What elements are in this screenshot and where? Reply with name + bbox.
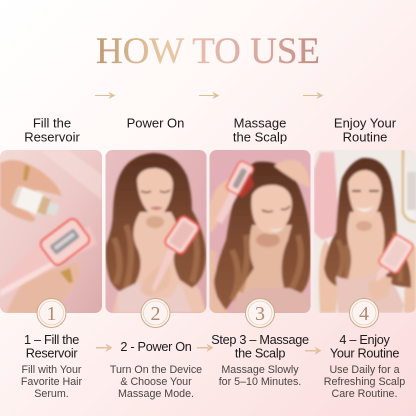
top [118,282,192,313]
icon: brush head [38,217,92,267]
label: enjoy your routine: Routine [343,130,387,144]
step 4 text: Refreshing Scalp [324,376,405,388]
bottom arrows [96,344,322,355]
step 2 text: Massage Mode. [118,388,194,400]
step 1 text: Serum. [34,388,69,400]
label: enjoy your routine: Enjoy Your [334,116,396,130]
step 2 text: & Choose Your [120,376,192,388]
face [251,185,292,234]
icon: upper hand [0,160,62,222]
towel [314,152,340,240]
label: fill the reservoir: Reservoir [24,130,80,144]
top arrows [95,92,324,99]
top [336,272,404,313]
step 3 text: for 5–10 Minutes. [219,376,301,388]
step 3 text [211,333,309,388]
step 4 text: Your Routine [330,346,399,360]
hand [368,277,392,301]
icon: brush handle [376,266,391,282]
chest [236,224,293,300]
badge: step 2 [141,298,170,328]
badge: step 3: 3 [255,303,265,325]
label: power on: Power On [127,116,184,130]
face [348,170,382,220]
step 4 text: Use Daily for a [329,364,400,376]
step 4 text: Care Routine. [332,388,397,400]
step 1 text [21,333,83,400]
icon: brush head [378,234,414,274]
badge: step 4 [350,298,378,328]
icon: brush head [163,215,201,255]
step 1 text: Reservoir [26,346,78,360]
face [137,168,173,215]
badge: step 4: 4 [359,303,369,325]
top [232,288,310,313]
label: fill the reservoir: Fill the [33,116,71,130]
badge: step 3 [246,298,274,328]
icon: lower hand [7,262,81,313]
arm and shoulder [209,250,228,313]
step 2 text: 2 - Power On [120,340,192,354]
icon: brush handle [216,188,238,224]
panel: photo 2, power on [105,150,207,313]
icon: serum bottle [11,185,59,216]
icon: brush handle [30,228,96,280]
hair [106,153,206,298]
step labels [24,116,397,144]
shoulders and chest [112,205,206,313]
step 1 text: Favorite Hair [21,376,83,388]
icon: brush handle [152,245,176,292]
hair [214,162,311,310]
left hand [210,179,230,232]
step 3 text: Massage Slowly [221,364,299,376]
step 4 text: 4 – Enjoy [339,333,390,347]
hand [140,286,150,296]
badge: step 1: 1 [46,303,56,325]
right hand [274,160,310,188]
badge: step 2: 2 [150,303,160,325]
chest [346,210,387,280]
panel: photo 3, massage scalp [209,150,311,313]
arms [319,240,340,313]
hair [324,158,411,288]
step 4 text [324,333,405,400]
label: massage the scalp: the Scalp [233,130,287,144]
step 1 text: Fill with Your [22,364,82,376]
step 3 text: Step 3 – Massage [211,333,309,347]
panel: photo 4, enjoy routine [314,150,416,313]
title: HOW TO USE [96,31,320,72]
step 2 text: Turn On the Device [110,364,202,376]
step 2 text [110,340,202,400]
icon: brush head [225,160,255,196]
mirror [403,150,416,222]
step 1 text: 1 – Fill the [24,333,79,347]
badge: step 1 [37,298,66,328]
step 3 text: the Scalp [235,346,285,360]
label: massage the scalp: Massage [234,116,286,130]
panel: photo 1, serum and brush [0,150,102,313]
